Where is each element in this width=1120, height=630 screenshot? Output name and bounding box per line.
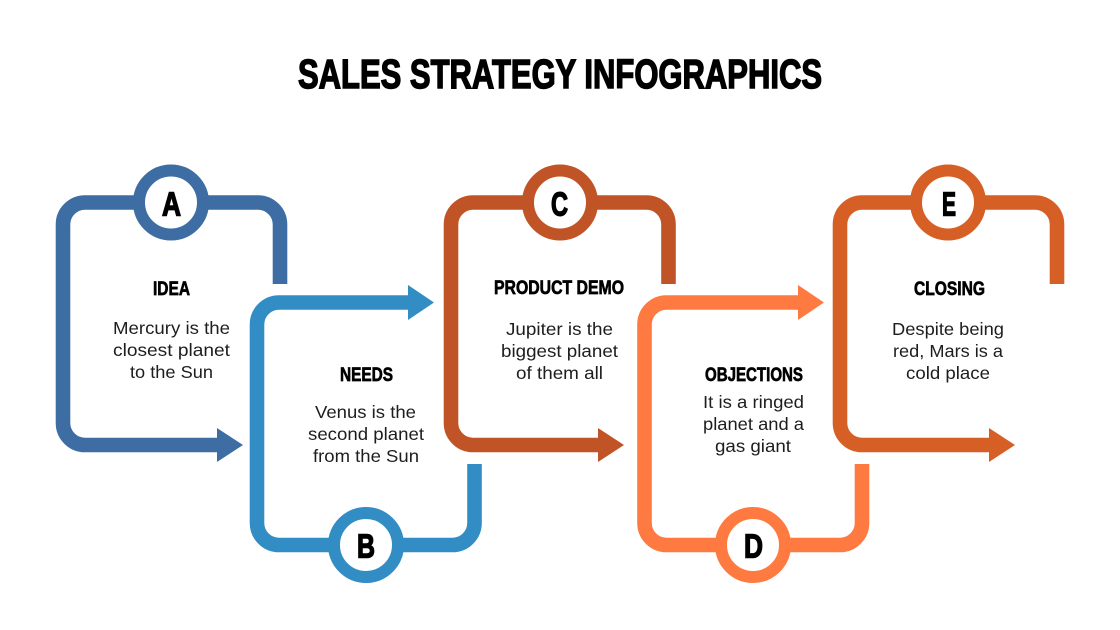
heading: product demo: PRODUCT DEMO — [494, 277, 624, 299]
heading: objections: OBJECTIONS — [705, 364, 803, 386]
panel: D objections — [644, 285, 862, 577]
panel: B needs — [257, 285, 474, 577]
heading: closing: CLOSING — [914, 278, 985, 300]
text: product demo description: biggest planet — [501, 341, 618, 361]
badge A — [139, 170, 203, 234]
panel: E closing — [840, 170, 1057, 462]
badge D: D — [744, 528, 763, 564]
text: needs description: from the Sun — [313, 446, 419, 466]
panel: C product demo — [451, 170, 668, 462]
text: idea description: to the Sun — [130, 362, 213, 382]
badge C: C — [551, 186, 568, 222]
badge B: B — [357, 528, 375, 564]
badge B — [334, 513, 398, 577]
heading: idea: IDEA — [153, 278, 190, 300]
text: objections description: gas giant — [715, 436, 791, 456]
text: idea description: Mercury is the — [113, 318, 230, 338]
text: needs description: second planet — [308, 424, 424, 444]
badge D — [721, 513, 785, 577]
badge E — [916, 170, 980, 234]
title: SALES STRATEGY INFOGRAPHICS — [298, 51, 822, 97]
panel: A idea — [63, 170, 280, 462]
connector path with arrow B — [257, 285, 474, 545]
connector path with arrow A — [63, 202, 280, 462]
text: closing description: cold place — [906, 363, 990, 383]
text: objections description: planet and a — [703, 414, 804, 434]
text: objections description: It is a ringed — [703, 392, 804, 412]
connector path with arrow D — [644, 285, 862, 545]
text: product demo description — [501, 319, 618, 383]
text: idea description: closest planet — [113, 340, 230, 360]
text: objections description — [703, 392, 804, 456]
connector path with arrow C — [451, 202, 668, 462]
text: closing description — [892, 319, 1004, 383]
text: closing description: red, Mars is a — [893, 341, 1003, 361]
badge C — [528, 170, 592, 234]
text: needs description: Venus is the — [315, 402, 416, 422]
text: idea description — [113, 318, 230, 382]
badge A: A — [162, 186, 181, 222]
text: needs description — [308, 402, 424, 466]
connector path with arrow E — [840, 202, 1057, 462]
text: product demo description: Jupiter is the — [506, 319, 613, 339]
heading: needs: NEEDS — [340, 364, 393, 386]
text: product demo description: of them all — [516, 363, 603, 383]
text: closing description: Despite being — [892, 319, 1004, 339]
badge E: E — [942, 186, 956, 222]
